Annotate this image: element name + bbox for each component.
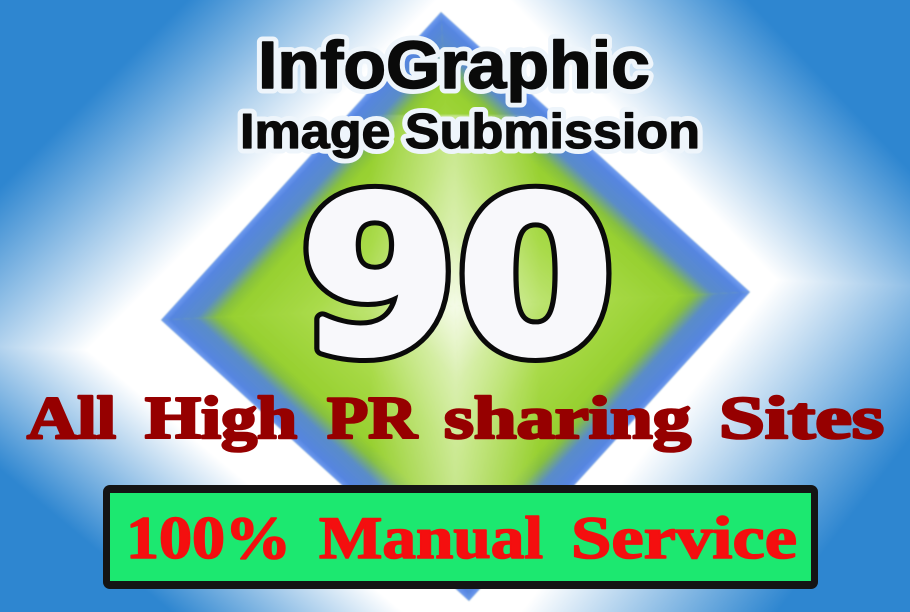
headline: All High PR sharing Sites: PR: [327, 385, 418, 451]
big number 90: 90: [300, 152, 614, 403]
subtitle: Image Submission: Image Submission: [240, 105, 700, 159]
callout: 100% Manual Service: 100%: [126, 505, 291, 571]
callout: 100% Manual Service: Service: [571, 505, 797, 571]
headline: All High PR sharing Sites: High: [145, 385, 297, 451]
headline: All High PR sharing Sites: [27, 385, 884, 451]
diamond shape: [161, 12, 750, 601]
subtitle: Image Submission: Image Submission: [240, 105, 700, 159]
title: InfoGraphic: InfoGraphic: [258, 28, 650, 103]
callout: 100% Manual Service: Manual: [319, 505, 543, 571]
headline: All High PR sharing Sites: Sites: [719, 385, 884, 451]
title: InfoGraphic: InfoGraphic: [258, 28, 650, 103]
big number 90: 90: [300, 152, 614, 403]
headline: All High PR sharing Sites: All: [27, 385, 116, 451]
callout: 100% Manual Service: [103, 485, 818, 589]
headline: All High PR sharing Sites: sharing: [444, 385, 691, 451]
